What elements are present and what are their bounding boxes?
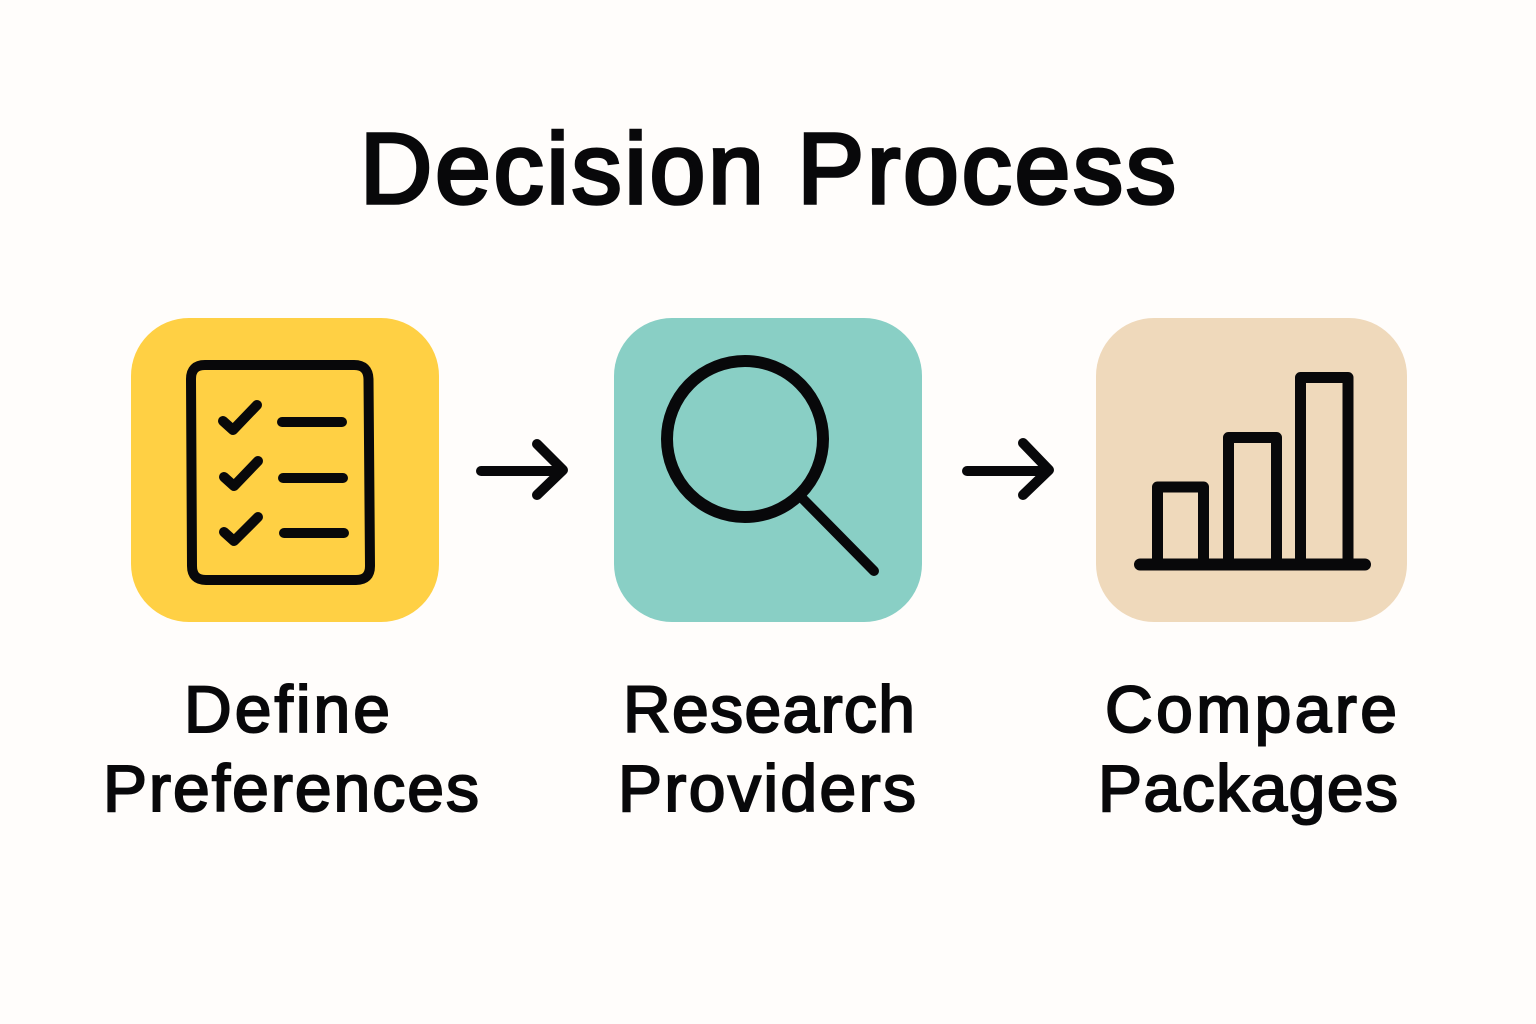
- panel: research providers: [614, 318, 922, 622]
- label: research providers: Providers: [618, 751, 916, 825]
- panel: compare packages: [1096, 318, 1407, 622]
- label: research providers: Research: [623, 672, 915, 746]
- label: research providers: [618, 672, 916, 825]
- arrow: step two to three: [967, 443, 1049, 495]
- icon: magnifying glass: [667, 361, 874, 571]
- label: compare packages: Packages: [1098, 751, 1398, 825]
- label: define preferences: [103, 672, 479, 825]
- panel: define preferences: [131, 318, 439, 622]
- icon: checklist: [191, 365, 370, 580]
- icon: bar chart: [1140, 378, 1365, 564]
- title: Decision Process: [360, 113, 1176, 225]
- label: compare packages: [1098, 672, 1398, 825]
- label: define preferences: Preferences: [103, 751, 479, 825]
- label: compare packages: Compare: [1105, 672, 1397, 746]
- arrow: step one to two: [481, 444, 563, 495]
- label: define preferences: Define: [184, 672, 390, 746]
